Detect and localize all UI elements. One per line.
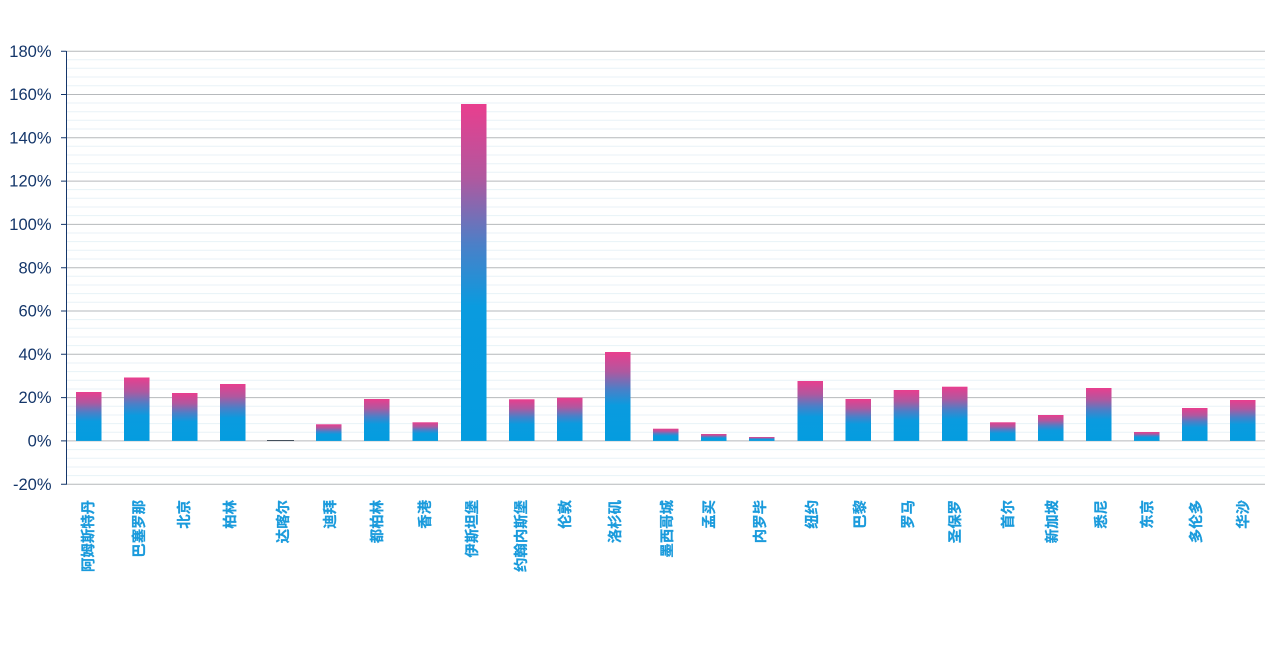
city labels: 悉尼 — [1093, 500, 1110, 529]
city labels: 新加坡 — [1043, 499, 1061, 543]
y axis — [9, 43, 66, 494]
city labels: 圣保罗 — [947, 500, 964, 543]
y axis: 60% — [18, 303, 52, 321]
y axis: 80% — [18, 259, 52, 277]
city labels: 孟买 — [701, 500, 718, 529]
city labels: 罗马 — [900, 500, 917, 529]
y axis: 20% — [18, 389, 52, 407]
y axis: 100% — [9, 216, 52, 234]
city labels: 约翰内斯堡 — [512, 500, 530, 572]
city labels: 阿姆斯特丹 — [79, 500, 97, 572]
city labels: 迪拜 — [322, 500, 339, 529]
city labels: 伦敦 — [556, 499, 574, 529]
y axis: 140% — [9, 129, 52, 147]
city labels: 墨西哥城 — [658, 499, 676, 558]
city labels: 伊斯坦堡 — [463, 500, 481, 558]
city labels: 北京 — [175, 500, 193, 529]
city labels: 达喀尔 — [274, 500, 292, 543]
y axis: -20% — [13, 476, 52, 494]
city labels: 都柏林 — [369, 499, 386, 543]
city labels: 内罗毕 — [752, 500, 769, 543]
city labels — [79, 499, 1252, 572]
city labels: 巴黎 — [852, 500, 869, 529]
city labels: 多伦多 — [1187, 500, 1205, 543]
y axis: 160% — [9, 86, 52, 104]
y axis: 40% — [18, 346, 52, 364]
city labels: 香港 — [416, 499, 434, 529]
city labels: 纽约 — [803, 500, 821, 529]
y axis: 180% — [9, 43, 52, 61]
city labels: 华沙 — [1234, 500, 1252, 529]
bars — [76, 104, 1256, 441]
city labels: 东京 — [1138, 500, 1156, 529]
city labels: 首尔 — [999, 500, 1017, 529]
y axis: 120% — [9, 173, 52, 191]
city labels: 柏林 — [222, 499, 239, 529]
y axis: 0% — [28, 432, 52, 450]
city labels: 巴塞罗那 — [130, 500, 148, 558]
city labels: 洛杉矶 — [607, 499, 624, 543]
